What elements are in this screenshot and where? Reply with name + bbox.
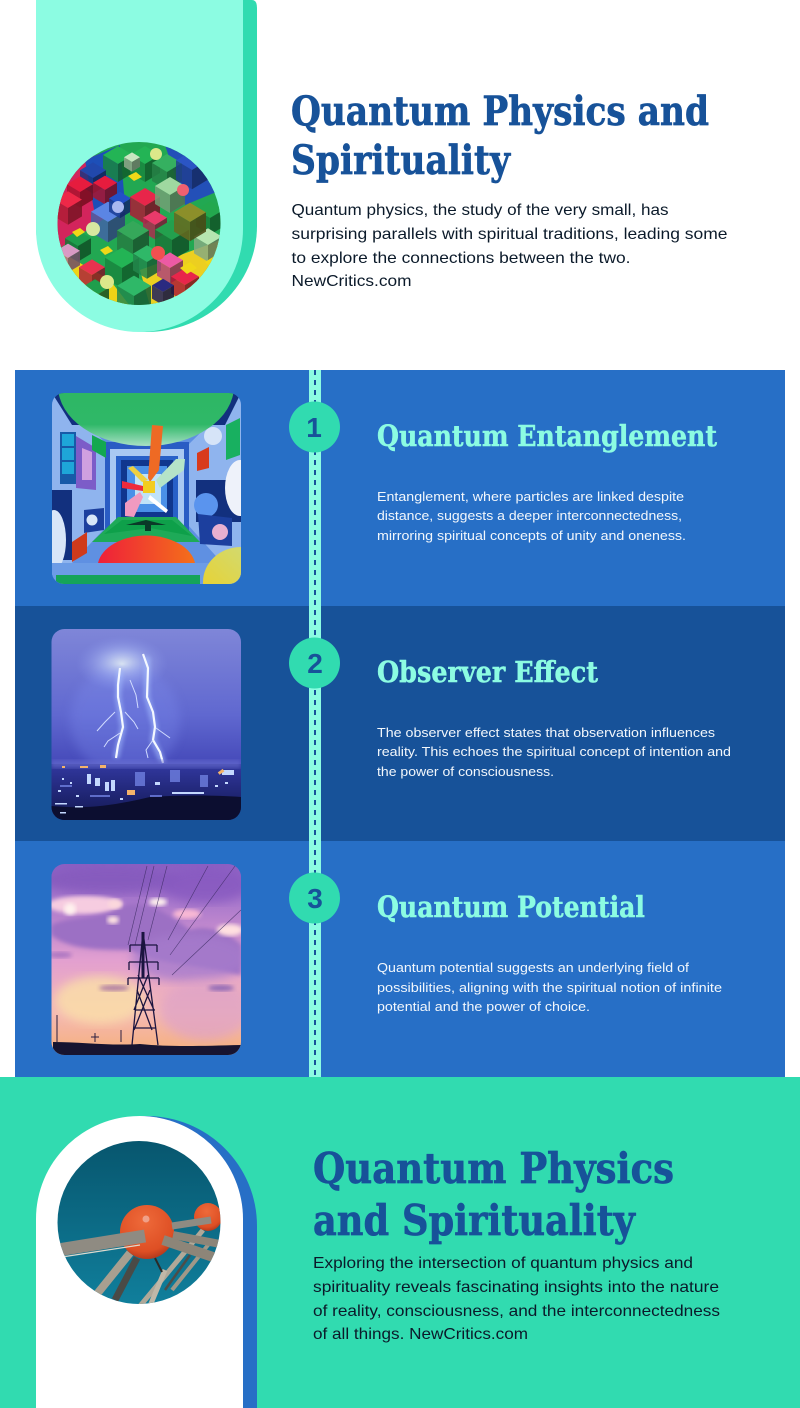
arch badge <box>36 1116 257 1408</box>
panel: conclusion <box>0 1077 800 1408</box>
conclusion description: spirituality reveals fascinating insights into the nature <box>313 1279 719 1296</box>
number badge 3: 3 <box>307 883 323 914</box>
header description: NewCritics.com <box>292 273 412 290</box>
number badge 1 <box>289 402 340 452</box>
conclusion description: of reality, consciousness, and the interconnectedness <box>313 1303 720 1320</box>
conclusion description: Exploring the intersection of quantum physics and <box>313 1255 693 1272</box>
conclusion title <box>313 1144 674 1245</box>
body text <box>377 725 731 779</box>
body text: The observer effect states that observation influences <box>377 725 716 740</box>
header title: Spirituality <box>291 137 512 184</box>
body text <box>377 960 722 1014</box>
image: lightning over city <box>51 629 241 820</box>
image: pylon at sunset <box>52 864 241 1055</box>
number badge 3 <box>289 872 340 924</box>
body text: mirroring spiritual concepts of unity and oneness. <box>377 528 686 543</box>
body text: possibilities, aligning with the spiritual notion of infinite <box>377 980 722 995</box>
header description: Quantum physics, the study of the very small, has <box>292 202 668 219</box>
header mosaic image <box>58 142 220 305</box>
conclusion title: and Spirituality <box>313 1196 636 1245</box>
body text: potential and the power of choice. <box>377 999 590 1014</box>
number badge 2 <box>289 638 340 688</box>
header title: Quantum Physics and <box>291 88 709 135</box>
body text: Quantum potential suggests an underlying field of <box>377 960 689 975</box>
body text: Entanglement, where particles are linked despite <box>377 489 684 504</box>
number badge 1: 1 <box>306 412 322 443</box>
body text <box>377 489 686 543</box>
panel: quantum potential <box>15 841 785 1077</box>
header description: to explore the connections between the two. <box>292 250 630 267</box>
header description: surprising parallels with spiritual traditions, leading some <box>292 226 728 243</box>
image: orange spheres on rods <box>57 1141 222 1306</box>
header pill badge <box>36 0 257 332</box>
body text: the power of consciousness. <box>377 764 554 779</box>
conclusion description <box>313 1255 720 1343</box>
timeline connector <box>309 370 321 1077</box>
number badge 2: 2 <box>307 648 323 679</box>
header description <box>292 202 728 290</box>
heading: Observer Effect <box>377 655 599 689</box>
body text: reality. This echoes the spiritual concept of intention and <box>377 744 731 759</box>
heading: Quantum Entanglement <box>377 419 718 453</box>
body text: distance, suggests a deeper interconnectedness, <box>377 508 682 523</box>
conclusion description: of all things. NewCritics.com <box>313 1326 528 1343</box>
conclusion title: Quantum Physics <box>313 1144 674 1193</box>
image: colourful corridor <box>52 393 241 584</box>
heading: Quantum Potential <box>377 890 645 924</box>
header title <box>291 88 709 184</box>
panel: quantum entanglement <box>15 370 785 606</box>
panel: observer effect <box>15 606 785 841</box>
